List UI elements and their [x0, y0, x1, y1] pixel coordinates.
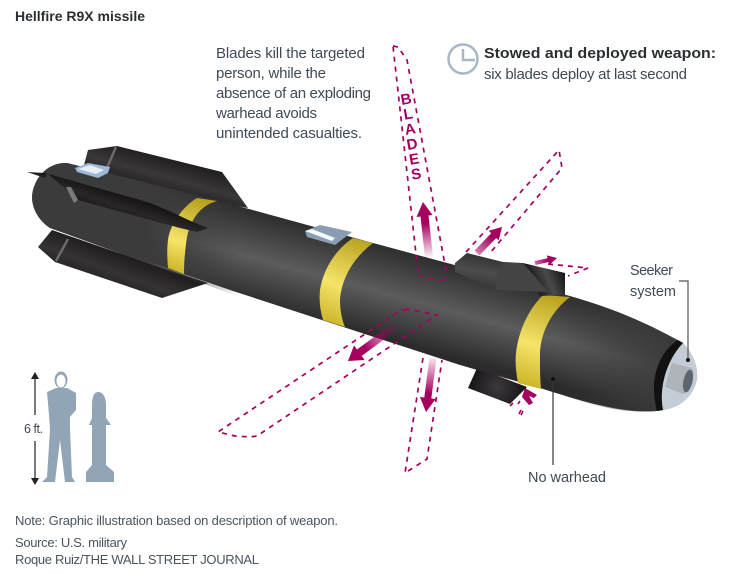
- rear fin strut lines: [56, 147, 116, 261]
- title: Hellfire R9X missile: [15, 8, 145, 24]
- yellow band: front: [516, 295, 570, 389]
- blades label: A: [403, 120, 417, 139]
- text block: blades explanation: unintended casualties.: [216, 125, 362, 142]
- no warhead leader line: [551, 377, 555, 465]
- arrow: lower left: [348, 322, 399, 361]
- text block: blades explanation: warhead avoids: [215, 105, 317, 122]
- text block: blades explanation: absence of an exploding: [216, 85, 371, 102]
- text block: blades explanation: person, while the: [216, 65, 326, 82]
- silhouette: missile: [86, 392, 114, 482]
- seeker leader line: [679, 281, 690, 362]
- arrow: small lower front: [522, 388, 537, 405]
- icon: clock: [448, 44, 478, 74]
- blades label: [399, 90, 423, 184]
- note and credits: [15, 513, 338, 567]
- note and credits: Roque Ruiz/THE WALL STREET JOURNAL: [15, 552, 259, 567]
- scale: height arrow: [31, 372, 39, 485]
- arrow: up: [416, 202, 433, 257]
- lower front fin: [468, 368, 527, 404]
- arrow: down: [420, 358, 436, 412]
- note and credits: Source: U.S. military: [15, 535, 128, 550]
- text block: stowed and deployed weapon: six blades deploy at last second: [484, 66, 687, 83]
- blades label: D: [405, 135, 419, 154]
- blade outline: bottom: [405, 358, 442, 473]
- front top fin: [523, 263, 565, 296]
- rear lug: [75, 163, 110, 178]
- nose ring: [654, 340, 683, 411]
- text block: stowed and deployed weapon: [484, 45, 716, 83]
- text block: blades explanation: Blades kill the targeted: [216, 45, 365, 62]
- seeker label: system: [630, 284, 676, 300]
- scale label: 6 ft.: [24, 422, 43, 436]
- seeker cylinder: [665, 363, 695, 394]
- blade outline: small lower front: [510, 401, 523, 415]
- text block: stowed and deployed weapon: Stowed and deployed weapon:: [484, 45, 716, 62]
- blades label: B: [399, 90, 413, 109]
- silhouette: person: [42, 372, 76, 482]
- rear fin: bottom: [38, 230, 208, 298]
- raised housing: [455, 253, 548, 292]
- slit on rear body: [66, 187, 78, 203]
- rear fin: top: [84, 146, 248, 208]
- note and credits: Note: Graphic illustration based on description of weapon.: [15, 513, 338, 528]
- blades label: S: [410, 165, 423, 184]
- body: [32, 163, 697, 411]
- arrow: upper right: [474, 227, 502, 255]
- seeker dome: [662, 343, 697, 410]
- blade outline: top with label: [393, 46, 448, 281]
- seeker label: Seeker: [630, 263, 673, 279]
- no warhead label: No warhead: [528, 470, 606, 486]
- middle lug: [305, 225, 352, 245]
- blades label: L: [402, 105, 414, 124]
- body shading: nose: [560, 293, 683, 412]
- blade outline: far right: [548, 264, 588, 276]
- text block: blades explanation: [215, 45, 371, 142]
- yellow band: middle: [320, 238, 373, 327]
- arrow: far right: [534, 255, 557, 265]
- blades label: E: [408, 150, 421, 169]
- rear fin: middle spike: [27, 172, 208, 232]
- blade outline: upper right: [466, 150, 562, 253]
- blade outline: lower left: [218, 309, 437, 437]
- yellow band: rear: [167, 198, 217, 274]
- body shading: rear: [32, 163, 240, 297]
- missile: [27, 146, 697, 412]
